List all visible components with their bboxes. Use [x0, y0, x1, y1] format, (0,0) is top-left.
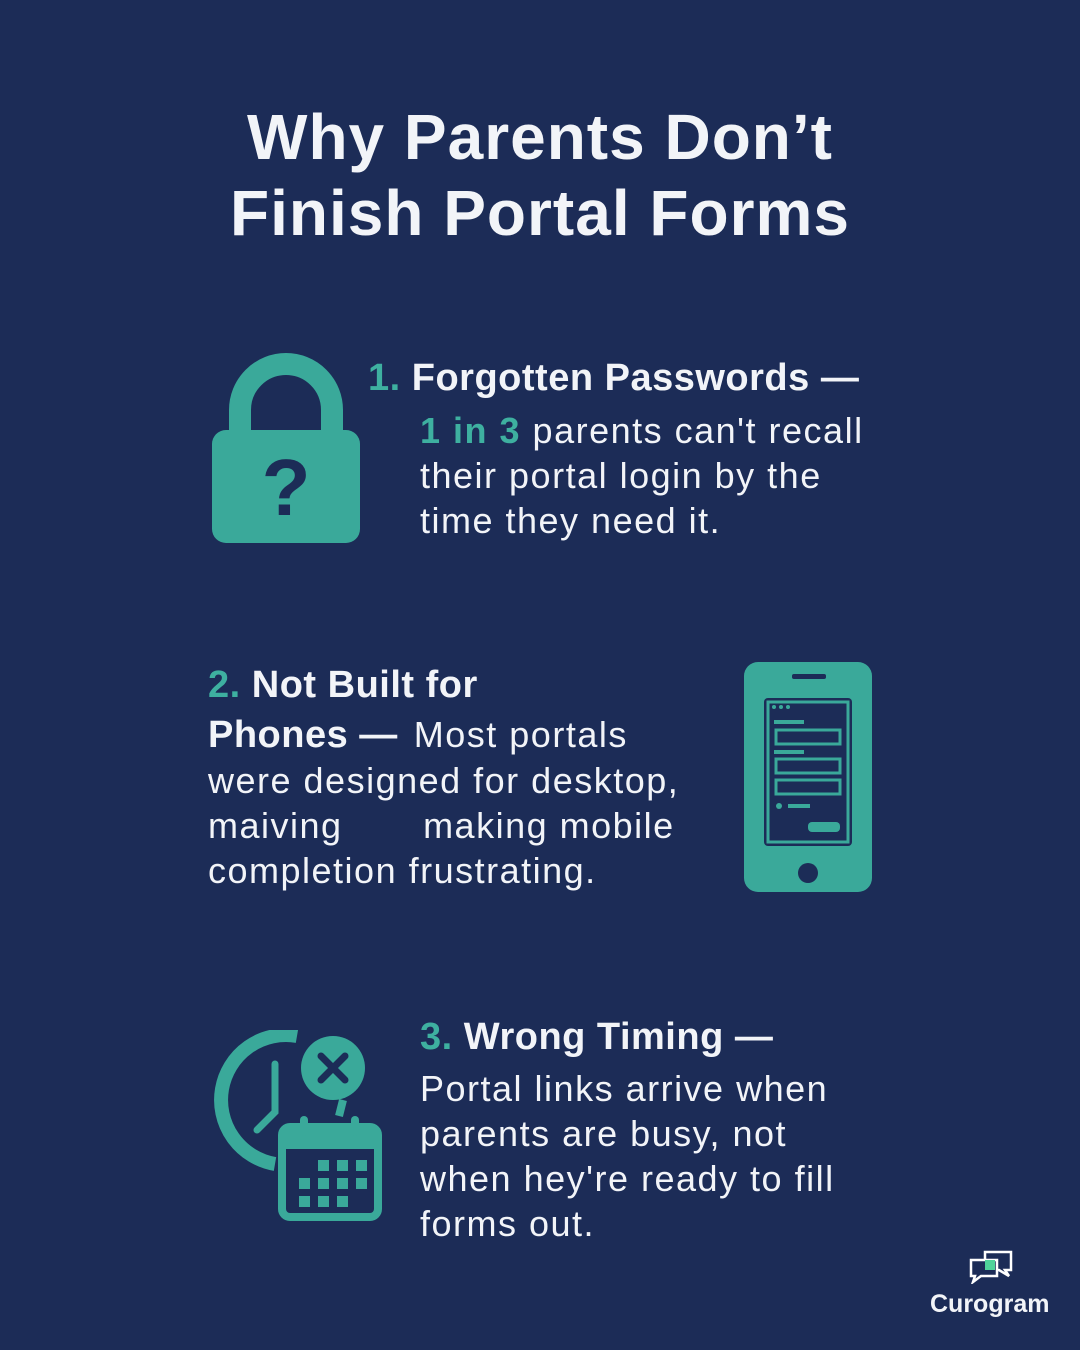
item 3: wrong timing: when hey're ready to fill: [420, 1158, 835, 1199]
icon: clock and calendar: [214, 1030, 382, 1221]
icon: padlock with question mark: [212, 353, 360, 543]
title: Finish Portal Forms: [230, 177, 850, 249]
item 2: not built for phones: 2. Not Built for: [208, 664, 478, 706]
item 2: not built for phones: [208, 664, 679, 891]
item 3: wrong timing: [420, 1016, 835, 1244]
logo: Curogram: [930, 1250, 1049, 1318]
title: [230, 101, 850, 249]
item 1: forgotten passwords: 1. Forgotten Passwords —: [368, 357, 859, 399]
item 1: forgotten passwords: their portal login by the: [420, 455, 822, 496]
item 2: not built for phones: maiving making mobile: [208, 805, 675, 846]
item 3: wrong timing: 3. Wrong Timing —: [420, 1016, 773, 1058]
icon: phone: [744, 662, 872, 892]
item 2: not built for phones: were designed for desktop,: [208, 760, 679, 801]
item 3: wrong timing: Portal links arrive when: [420, 1068, 828, 1109]
icon: padlock with question mark: ?: [262, 443, 310, 532]
item 3: wrong timing: forms out.: [420, 1203, 595, 1244]
item 3: wrong timing: parents are busy, not: [420, 1113, 787, 1154]
item 1: forgotten passwords: [368, 357, 864, 541]
item 2: not built for phones: Phones — Most portals: [208, 714, 628, 756]
item 1: forgotten passwords: time they need it.: [420, 500, 721, 541]
item 2: not built for phones: completion frustrating.: [208, 850, 597, 891]
title: Why Parents Don’t: [247, 101, 833, 173]
item 1: forgotten passwords: 1 in 3 parents can't recall: [420, 410, 864, 451]
logo: Curogram: Curogram: [930, 1290, 1049, 1318]
